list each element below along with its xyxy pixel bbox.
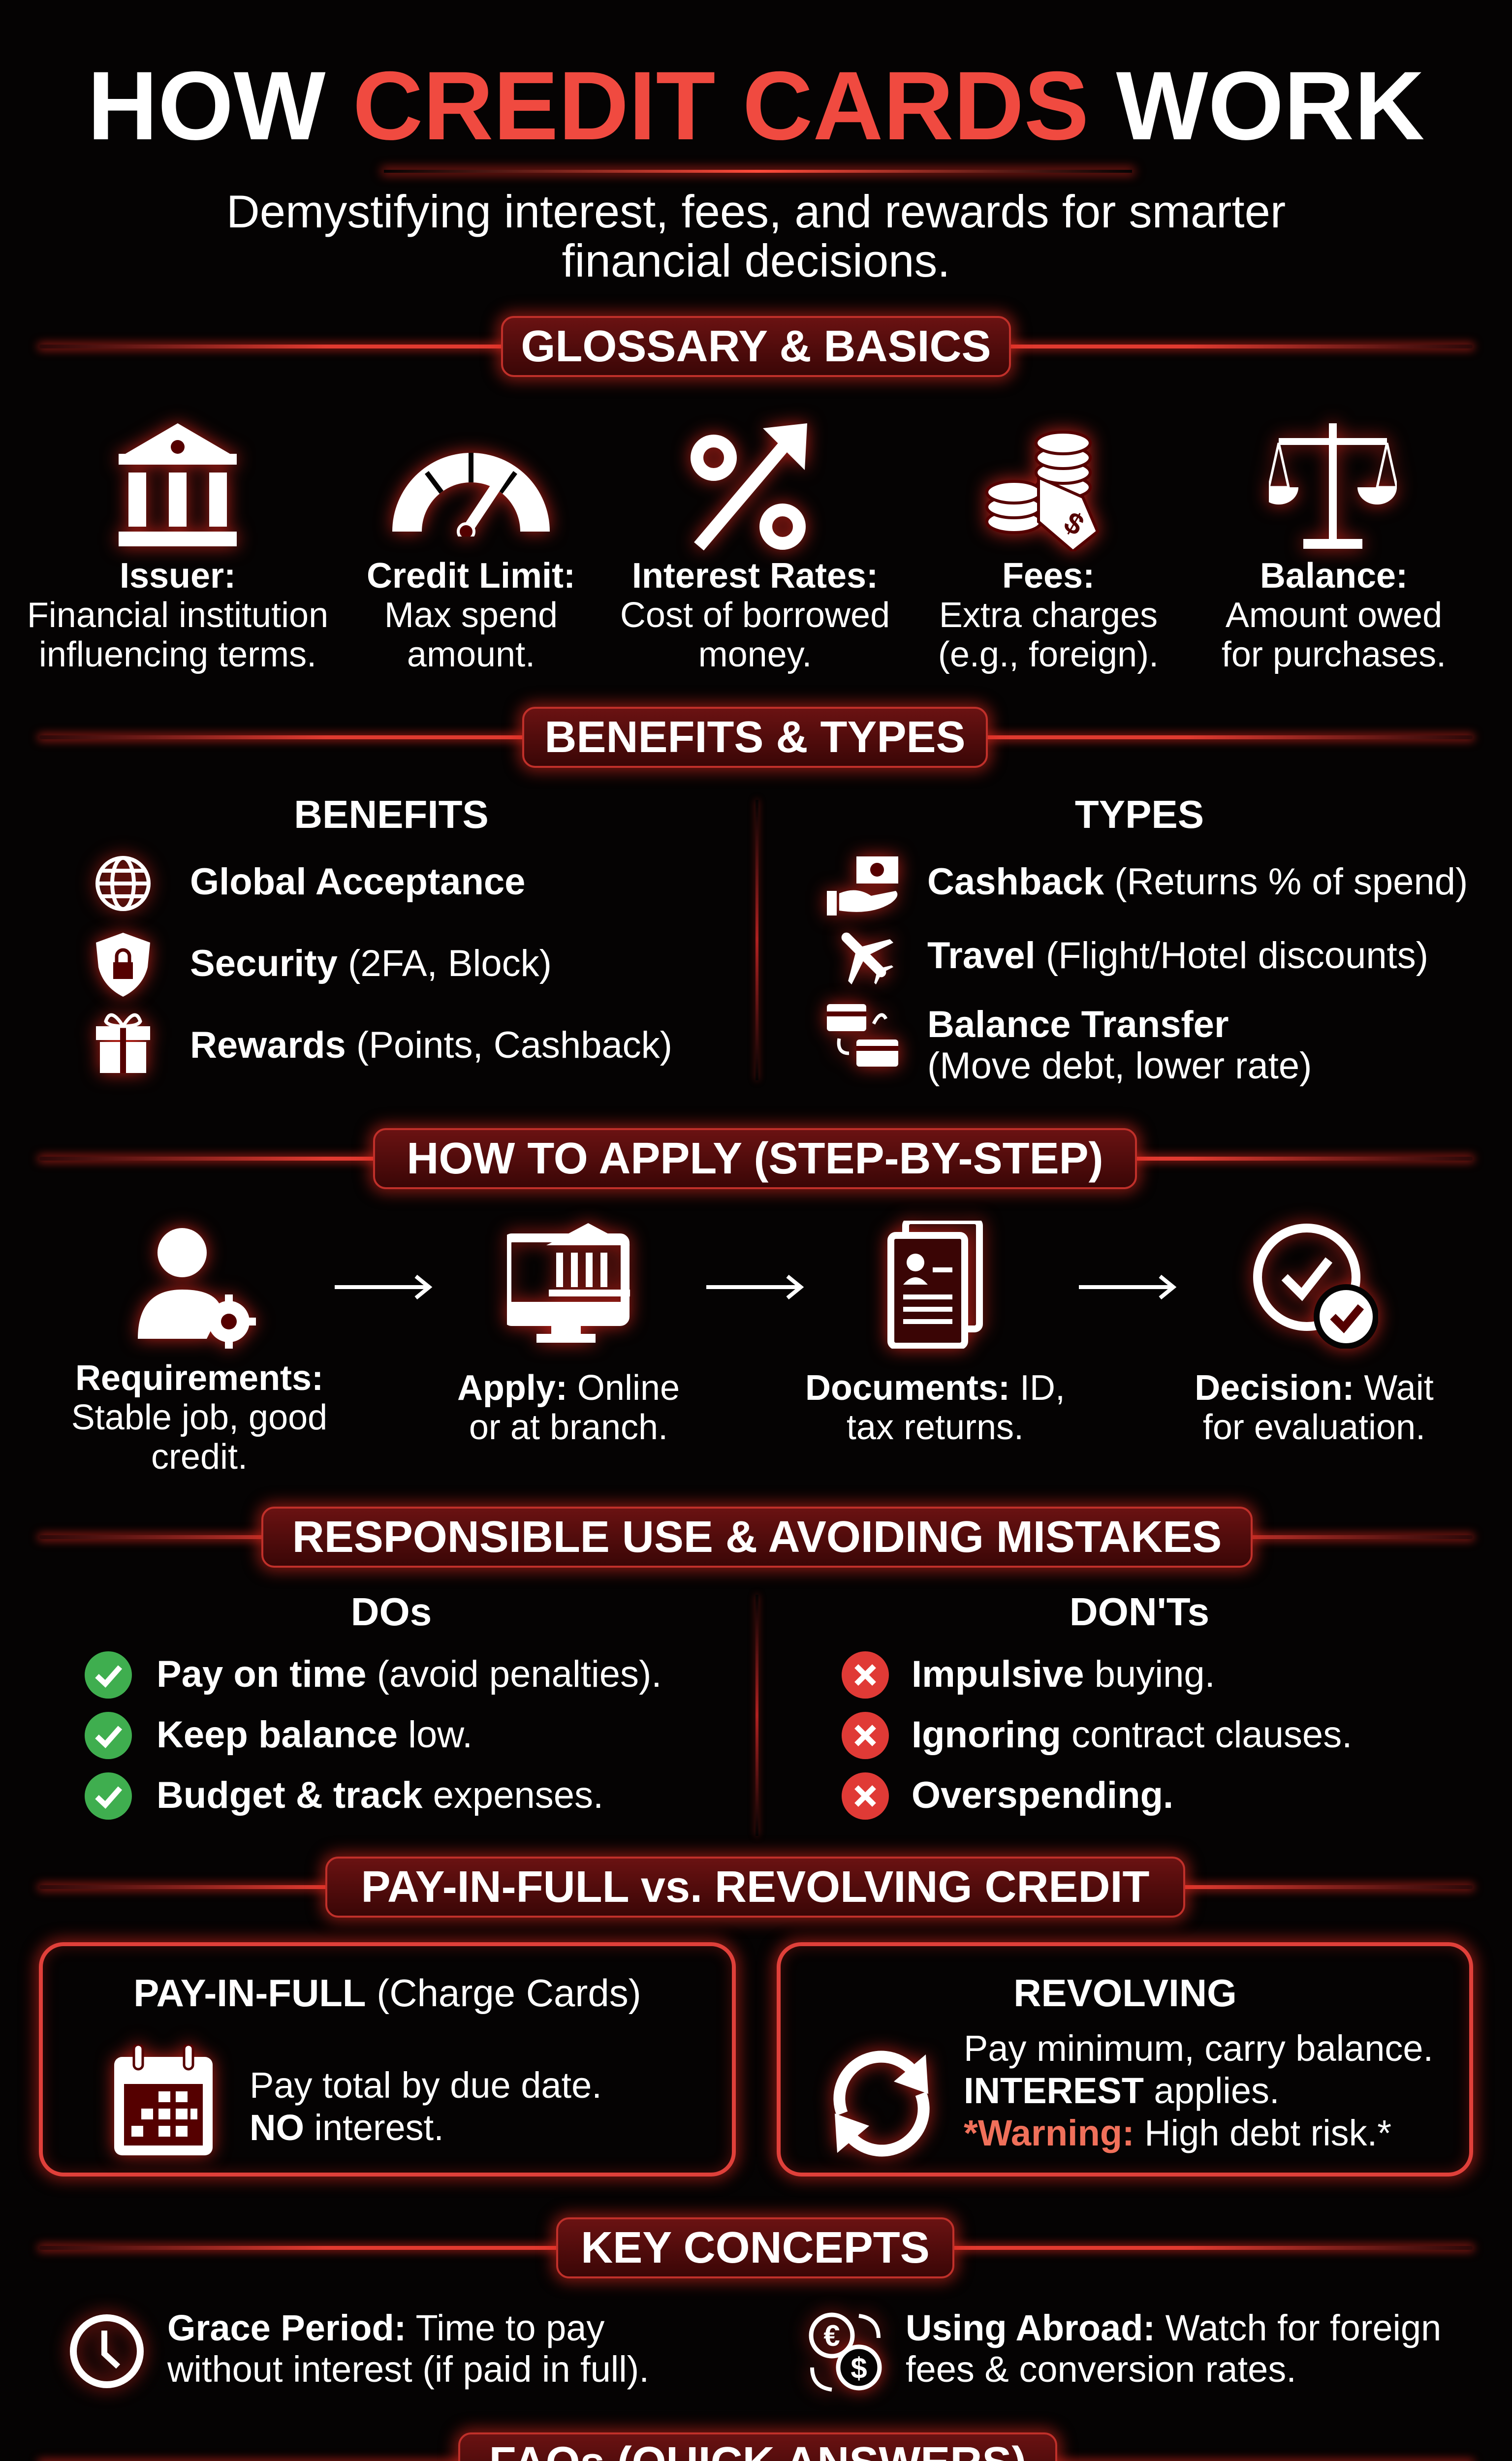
text: revolving details: *Warning: High debt risk.* xyxy=(964,2113,1391,2153)
text: balance transfer: Balance Transfer xyxy=(927,1004,1229,1045)
text: requirements: credit. xyxy=(151,1437,248,1477)
text: fees xyxy=(938,556,1159,674)
title: HOW CREDIT CARDS WORK xyxy=(88,51,1424,160)
text: overspending: Overspending. xyxy=(912,1774,1173,1816)
text: pay total: NO interest. xyxy=(250,2107,444,2148)
icon: cross xyxy=(841,1771,890,1821)
text: credit limit xyxy=(367,556,575,674)
text: fees: (e.g., foreign). xyxy=(938,635,1159,674)
icon: gift xyxy=(96,1011,150,1073)
text: issuer: Issuer: xyxy=(120,556,236,596)
heading: glossary: GLOSSARY & BASICS xyxy=(521,322,991,371)
text: issuer: Financial institution xyxy=(27,596,328,635)
text: global acceptance: Global Acceptance xyxy=(190,861,525,903)
text: documents: Documents: ID, xyxy=(805,1368,1065,1408)
icon: currency exchange: € xyxy=(823,2319,840,2352)
heading: benefits & types: BENEFITS & TYPES xyxy=(544,713,966,762)
text: credit limit: amount. xyxy=(407,635,535,674)
text: balance xyxy=(1222,556,1446,674)
text: balance: Amount owed xyxy=(1226,596,1442,635)
text: requirements: Requirements: xyxy=(75,1358,323,1398)
icon: cross xyxy=(841,1650,890,1700)
icon: percent arrow xyxy=(678,411,820,562)
text: cashback: Cashback (Returns % of spend) xyxy=(927,861,1468,903)
panel: steps xyxy=(0,1211,1512,1496)
text: apply: or at branch. xyxy=(469,1408,668,1447)
text: balance transfer: (Move debt, lower rate) xyxy=(927,1045,1312,1087)
text: rewards: Rewards (Points, Cashback) xyxy=(190,1024,672,1066)
text: pay total: Pay total by due date. xyxy=(250,2065,602,2106)
text: travel: Travel (Flight/Hotel discounts) xyxy=(927,935,1428,977)
text: grace period xyxy=(167,2307,649,2390)
text: decision: for evaluation. xyxy=(1203,1408,1425,1447)
text: revolving details xyxy=(964,2027,1433,2154)
panel: benefits xyxy=(84,792,672,1087)
text: ignoring: Ignoring contract clauses. xyxy=(912,1714,1352,1756)
icon: clock xyxy=(69,2313,145,2390)
heading: revolving: REVOLVING xyxy=(1013,1971,1237,2015)
text: interest rates: Interest Rates: xyxy=(632,556,878,596)
text: using abroad xyxy=(906,2307,1441,2390)
text: fees: Extra charges xyxy=(939,596,1158,635)
text: revolving details: Pay minimum, carry balance. xyxy=(964,2028,1433,2069)
icon: computer bank xyxy=(507,1223,630,1346)
panel: key concepts xyxy=(0,2294,1512,2402)
text: balance: Balance: xyxy=(1260,556,1408,596)
text: balance: for purchases. xyxy=(1222,635,1446,674)
heading: types: TYPES xyxy=(1075,792,1204,836)
panel: dos xyxy=(74,1587,714,1824)
text: impulsive: Impulsive buying. xyxy=(912,1653,1215,1695)
icon: scales xyxy=(1256,414,1408,563)
icon: balance transfer xyxy=(827,1004,901,1068)
text: fees: Fees: xyxy=(1002,556,1095,596)
heading: dos: DOs xyxy=(351,1590,432,1634)
panel: pay-in-full xyxy=(39,1942,736,2177)
icon: currency exchange: $ xyxy=(850,2352,867,2385)
icon: gauge xyxy=(380,440,562,549)
text: decision xyxy=(1166,1368,1462,1447)
heading: responsible use: RESPONSIBLE USE & AVOIDING MISTAKES xyxy=(292,1512,1222,1561)
text: pay total xyxy=(250,2064,602,2149)
panel: revolving xyxy=(777,1942,1473,2177)
text: requirements xyxy=(49,1358,349,1477)
icon: calendar xyxy=(112,2045,215,2158)
icon: check xyxy=(84,1711,133,1760)
text: keep balance low: Keep balance low. xyxy=(157,1714,472,1756)
icon: cashback hand xyxy=(827,856,901,915)
icon: clock check xyxy=(1250,1221,1378,1349)
subtitle xyxy=(226,186,1286,286)
text: documents: tax returns. xyxy=(847,1408,1024,1447)
panel: types xyxy=(807,788,1496,1083)
arrow xyxy=(706,1275,805,1299)
icon: check xyxy=(84,1771,133,1821)
arrow xyxy=(1079,1275,1177,1299)
icon: currency exchange xyxy=(805,2308,888,2395)
text: interest rates: Cost of borrowed xyxy=(620,596,890,635)
icon: cross xyxy=(841,1711,890,1760)
text: decision: Decision: Wait xyxy=(1195,1368,1434,1408)
text: issuer: influencing terms. xyxy=(39,635,316,674)
heading: pay in full vs revolving: PAY-IN-FULL vs. REVOLVING CREDIT xyxy=(361,1862,1149,1912)
icon: shield xyxy=(96,933,150,997)
icon: coins tag xyxy=(973,417,1109,562)
icon: person gear xyxy=(133,1221,261,1349)
subtitle: financial decisions. xyxy=(562,235,950,286)
text: credit limit: Max spend xyxy=(384,596,558,635)
heading: how to apply: HOW TO APPLY (STEP-BY-STEP) xyxy=(407,1134,1103,1183)
heading: key concepts: KEY CONCEPTS xyxy=(581,2223,930,2272)
text: credit limit: Credit Limit: xyxy=(367,556,575,596)
text: revolving details: INTEREST applies. xyxy=(964,2070,1280,2111)
text: grace period: Grace Period: Time to pay xyxy=(167,2307,604,2348)
text: interest rates xyxy=(620,556,890,674)
icon: cycle arrows xyxy=(822,2045,941,2163)
text: issuer xyxy=(27,556,328,674)
text: documents xyxy=(788,1368,1083,1447)
text: budget: Budget & track expenses. xyxy=(157,1774,603,1816)
text: apply xyxy=(423,1368,714,1447)
panel: donts xyxy=(807,1587,1496,1824)
text: requirements: Stable job, good xyxy=(71,1398,327,1437)
heading: pay-in-full: PAY-IN-FULL (Charge Cards) xyxy=(133,1971,641,2015)
text: using abroad: Using Abroad: Watch for foreign xyxy=(906,2307,1441,2348)
icon: globe xyxy=(84,844,162,923)
panel: glossary xyxy=(27,411,1446,674)
icon: coins tag: $ xyxy=(1059,505,1089,542)
text: grace period: without interest (if paid in full). xyxy=(167,2349,649,2390)
text: security: Security (2FA, Block) xyxy=(190,943,552,984)
text: apply: Apply: Online xyxy=(457,1368,680,1408)
icon: bank xyxy=(107,413,248,560)
text: pay on time: Pay on time (avoid penalties). xyxy=(157,1653,662,1695)
text: balance transfer xyxy=(927,1004,1312,1087)
heading: benefits: BENEFITS xyxy=(294,792,489,836)
subtitle: Demystifying interest, fees, and rewards for smarter xyxy=(226,186,1286,237)
icon: plane xyxy=(834,925,893,984)
heading: donts: DON'Ts xyxy=(1070,1590,1209,1634)
icon: check xyxy=(84,1650,133,1700)
arrow xyxy=(335,1275,433,1299)
text: interest rates: money. xyxy=(698,635,812,674)
text: using abroad: fees & conversion rates. xyxy=(906,2349,1296,2390)
icon: documents xyxy=(886,1221,984,1349)
